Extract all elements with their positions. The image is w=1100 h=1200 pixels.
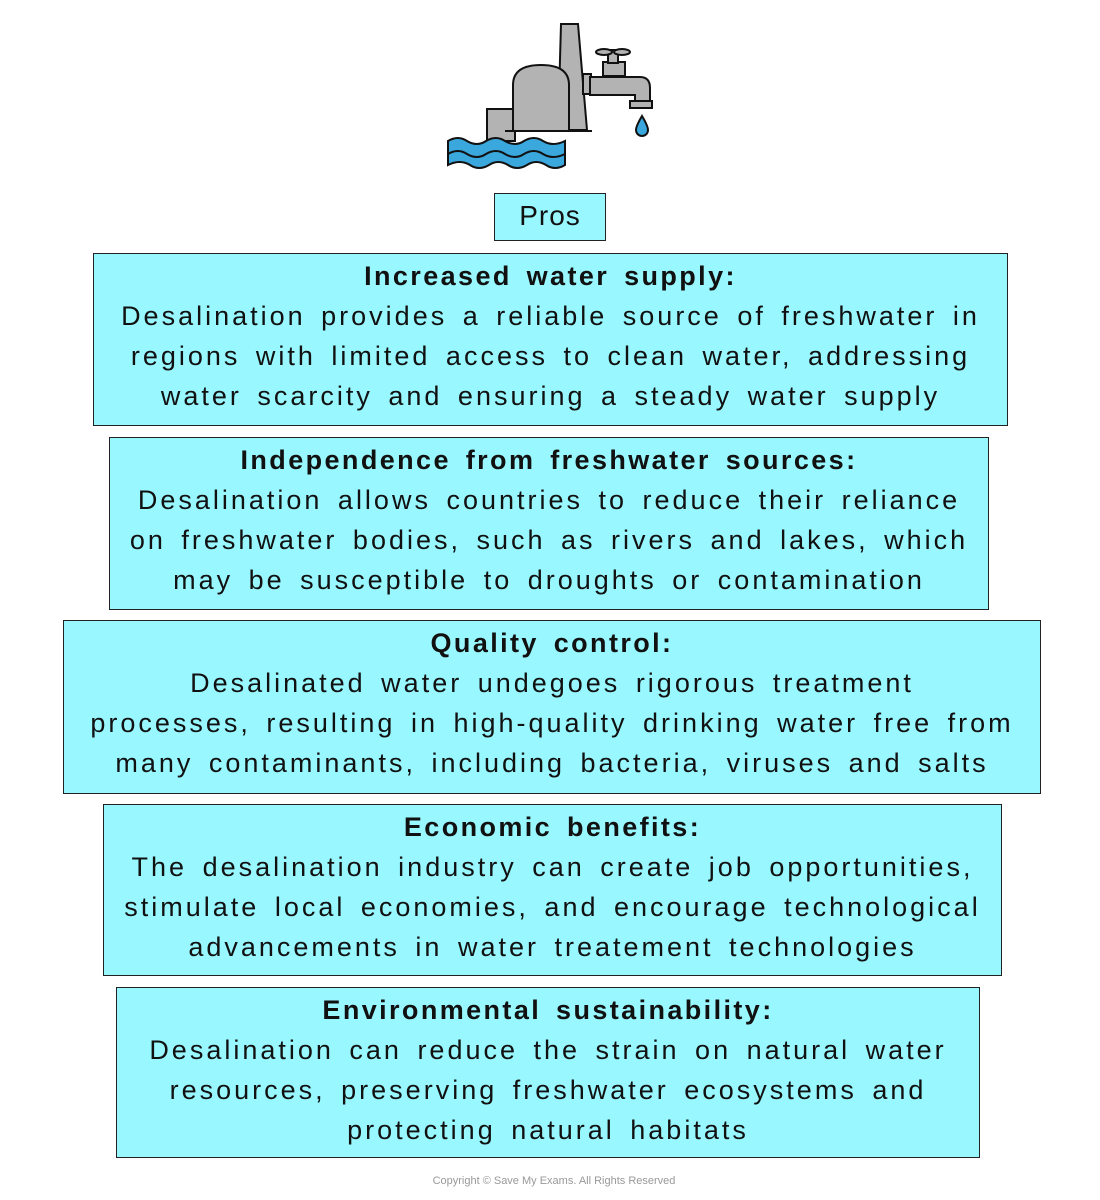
panel: environmental sustainability: Environmental sustainability: bbox=[322, 995, 774, 1025]
panel: economic benefits: stimulate local economies, and encourage technological bbox=[124, 892, 981, 922]
copyright: Copyright © Save My Exams. All Rights Reserved bbox=[433, 1175, 675, 1187]
heading: Pros bbox=[494, 193, 606, 241]
panel: increased water supply: Increased water supply: bbox=[364, 261, 737, 291]
heading: Pros: Pros bbox=[519, 200, 581, 231]
panel: independence bbox=[109, 437, 989, 610]
panel: quality control: Quality control: bbox=[431, 628, 673, 658]
panel: independence: Desalination allows countries to reduce their reliance bbox=[138, 485, 960, 515]
panel: independence: may be susceptible to droughts or contamination bbox=[173, 565, 925, 595]
icon: desalination plant with tap bbox=[447, 23, 653, 169]
panel: increased water supply: Desalination provides a reliable source of freshwater in bbox=[121, 301, 980, 331]
panel: quality control: many contaminants, including bacteria, viruses and salts bbox=[115, 748, 989, 778]
panel: economic benefits: advancements in water treatement technologies bbox=[188, 932, 917, 962]
panel: environmental sustainability: protecting natural habitats bbox=[347, 1115, 749, 1145]
panel: quality control: processes, resulting in high-quality drinking water free from bbox=[90, 708, 1014, 738]
panel: increased water supply bbox=[93, 253, 1008, 426]
panel: independence: Independence from freshwater sources: bbox=[241, 445, 857, 475]
panel: quality control bbox=[63, 620, 1041, 794]
panel: environmental sustainability: resources, preserving freshwater ecosystems and bbox=[170, 1075, 926, 1105]
panel: increased water supply: water scarcity and ensuring a steady water supply bbox=[161, 381, 940, 411]
panel: economic benefits bbox=[103, 804, 1002, 976]
panel: independence: on freshwater bodies, such as rivers and lakes, which bbox=[130, 525, 968, 555]
panel: quality control: Desalinated water undegoes rigorous treatment bbox=[190, 668, 914, 698]
panel: economic benefits: The desalination industry can create job opportunities, bbox=[132, 852, 973, 882]
panel: environmental sustainability bbox=[116, 987, 980, 1158]
panel: increased water supply: regions with limited access to clean water, addressing bbox=[131, 341, 970, 371]
panel: economic benefits: Economic benefits: bbox=[404, 812, 701, 842]
panel: environmental sustainability: Desalination can reduce the strain on natural water bbox=[149, 1035, 947, 1065]
